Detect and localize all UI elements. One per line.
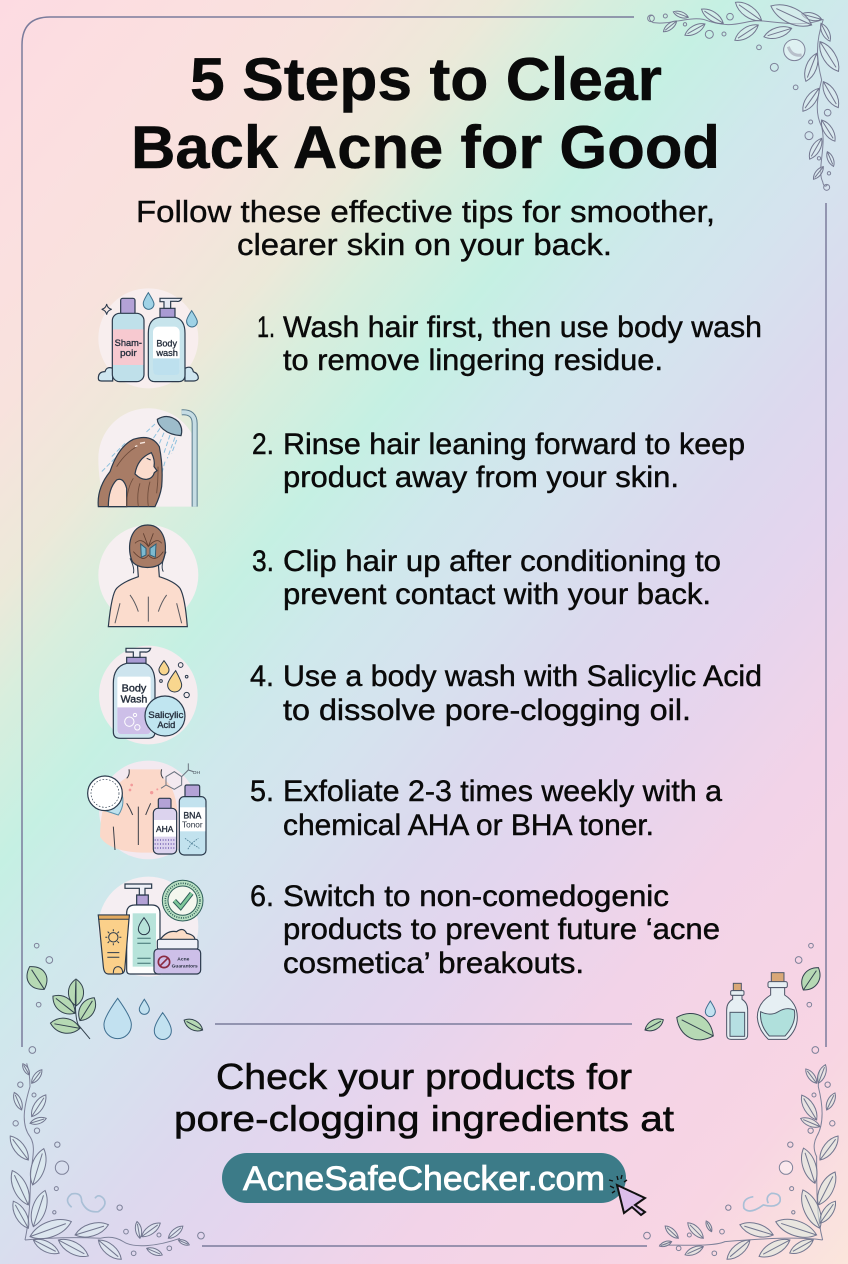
step 2 text: Rinse hair leaning forward to keep [283, 428, 745, 461]
title: Back Acne for Good [131, 114, 720, 181]
step 2 text: 2. [252, 428, 274, 461]
step 6: non-comedogenic products [98, 877, 720, 980]
title: 5 Steps to Clear [190, 46, 662, 113]
icon: woman rinsing under shower [98, 408, 195, 507]
icon: body wash with salicylic acid badge: Salicylic [148, 710, 184, 720]
step 3 text: Clip hair up after conditioning to [283, 545, 721, 578]
icon: shampoo and body wash bottles: Body [156, 339, 177, 349]
icon: non-comedogenic products and seal: Acne [177, 957, 190, 962]
icon: body wash with salicylic acid badge: Acid [157, 720, 175, 730]
step 6 text [250, 880, 720, 980]
step 6 text: Switch to non-comedogenic [283, 880, 669, 913]
step 3: clip hair up [98, 525, 721, 627]
subtitle [136, 194, 715, 262]
step 2 text [252, 428, 745, 494]
icon: back with clipped hair [98, 525, 198, 627]
step 3 text: prevent contact with your back. [283, 578, 711, 611]
step 5 text [250, 775, 723, 842]
icon: non-comedogenic products and seal: Guarantors [172, 963, 198, 968]
subtitle: Follow these effective tips for smoother, [136, 194, 715, 229]
step 4 text: 4. [250, 660, 274, 693]
icon: non-comedogenic products and seal [98, 877, 203, 977]
step 6 text: 6. [250, 880, 274, 913]
title [131, 46, 720, 181]
icon: shampoo and body wash bottles: wash [155, 348, 178, 358]
step 5 text: 5. [250, 775, 274, 808]
icon: body wash with salicylic acid badge: Body [122, 684, 147, 695]
website button [222, 1153, 626, 1203]
floral corner: bottom right [644, 1063, 842, 1263]
step 1 text [257, 311, 762, 377]
icon: body wash with salicylic acid badge [99, 646, 198, 744]
icon: back with exfoliating pad and toners: Tonor [182, 821, 203, 830]
step 1 text: Wash hair first, then use body wash [283, 311, 762, 344]
step 3 text: 3. [252, 545, 274, 578]
step 4 text: to dissolve pore-clogging oil. [283, 694, 691, 727]
essential oil bottles and leaves [643, 943, 825, 1053]
step 5 text: Exfoliate 2-3 times weekly with a [283, 775, 723, 808]
icon: shampoo and body wash bottles: poir [120, 348, 137, 358]
icon: back with exfoliating pad and toners [88, 761, 206, 859]
step 1 text: to remove lingering residue. [283, 344, 663, 377]
icon: body wash with salicylic acid badge: Wash [121, 695, 148, 706]
step 5: exfoliate [88, 761, 723, 859]
call to action text: Check your products for [216, 1056, 632, 1097]
step 5 text: chemical AHA or BHA toner. [283, 809, 654, 842]
leaves and water drops [22, 943, 205, 1053]
icon: back with exfoliating pad and toners: OH [193, 770, 201, 776]
icon: back with exfoliating pad and toners: AHA [156, 825, 174, 834]
step 1: wash hair first [98, 288, 762, 388]
step 4: salicylic acid body wash [99, 646, 762, 744]
step 2 text: product away from your skin. [283, 461, 679, 494]
icon: shampoo and body wash bottles: Sham- [115, 338, 142, 348]
website button: AcneSafeChecker.com [243, 1160, 605, 1198]
step 6 text: products to prevent future ‘acne [283, 913, 720, 946]
icon: back with exfoliating pad and toners: BNA [183, 810, 201, 820]
step 4 text: Use a body wash with Salicylic Acid [283, 660, 762, 693]
step 4 text [250, 660, 762, 727]
step 2: rinse hair leaning forward [98, 408, 745, 507]
subtitle: clearer skin on your back. [237, 227, 612, 262]
call to action text: pore-clogging ingredients at [174, 1098, 674, 1139]
step 1 text: 1. [257, 311, 275, 344]
step 6 text: cosmetica’ breakouts. [283, 947, 584, 980]
floral corner: top right [648, 0, 844, 190]
call to action text [174, 1056, 674, 1139]
step 3 text [252, 545, 721, 611]
icon: shampoo and body wash bottles [98, 288, 198, 388]
icon: cursor click [609, 1175, 645, 1215]
floral corner: bottom left [6, 1063, 204, 1263]
